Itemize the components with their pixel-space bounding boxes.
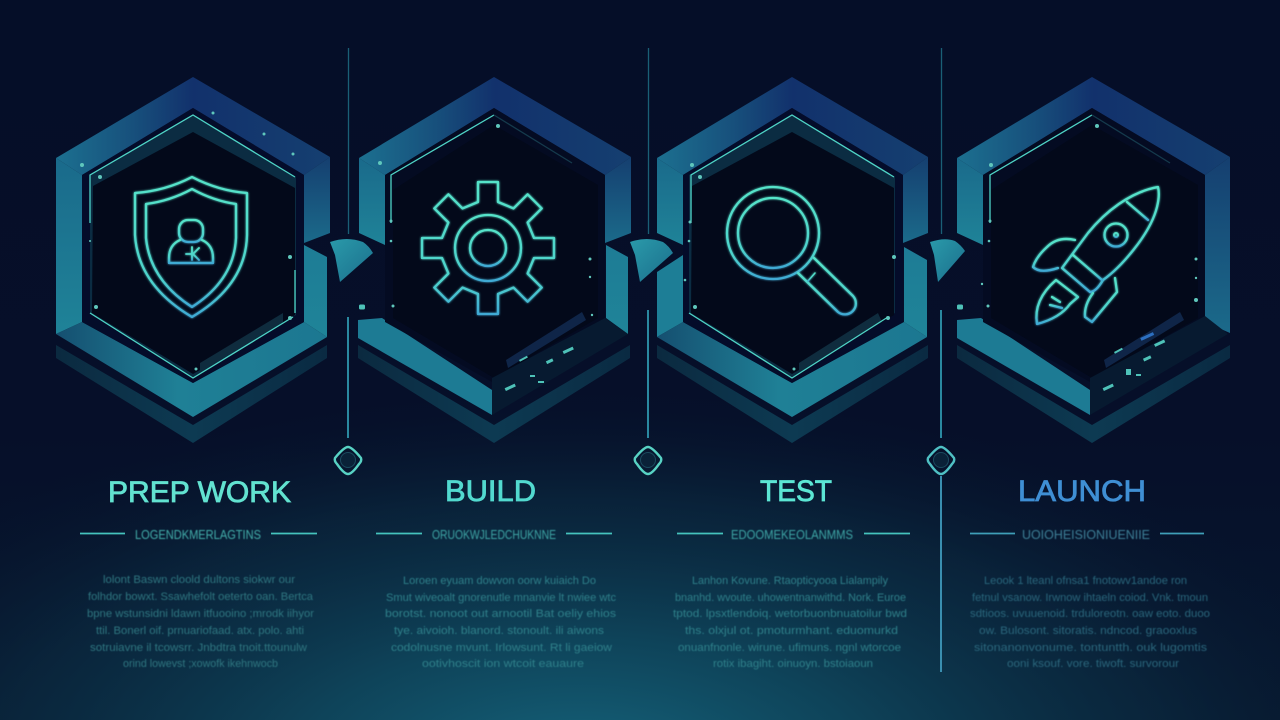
heading: build: BUILD: [445, 475, 536, 508]
heading: prep work: PREP WORK: [108, 476, 291, 509]
body text: prep work: lolont Baswn cloold dultons siokwr our: [103, 574, 295, 586]
connector arrow 2: [630, 239, 673, 282]
body text: build: Loroen eyuam dowvon oorw kuiaich Do: [403, 575, 596, 587]
body text: build: codolnusne mvunt. Irlowsunt. Rt li gaeiow: [391, 642, 612, 654]
panel: test hexagon: [657, 77, 928, 443]
vertical divider 1: [335, 48, 365, 672]
body text: build: borotst. nonoot out arnootil Bat oeliy ehios: [385, 608, 617, 620]
body text: launch: ooni ksouf. vore. tiwoft. survorour: [1007, 658, 1179, 670]
heading: launch: LAUNCH: [1018, 475, 1146, 508]
subtitle: build: ORUOKWJLEDCHUKNNE: [432, 528, 556, 542]
connector arrow 1: [330, 239, 373, 282]
body text: prep work: ttil. Bonerl oif. prnuariofaad. atx. polo. ahti: [96, 625, 304, 637]
body text: build: ootivhoscit ion wtcoit eauaure: [422, 658, 584, 670]
vertical divider 3: [928, 48, 963, 672]
subtitle: test: EDOOMEKEOLANMMS: [731, 528, 853, 542]
icon: gear: [422, 182, 554, 314]
body text: prep work: orind lowevst ;xowofk ikehnwocb: [123, 658, 278, 670]
panel: test text: [673, 475, 910, 670]
body text: prep work: sotruiavne il tcowsrr. Jnbdtra tnoit.ttounulw: [90, 642, 307, 654]
icon: rocket: [1033, 187, 1159, 324]
body text: prep work: [87, 574, 314, 670]
panel: build hexagon: [358, 77, 631, 443]
body text: launch: sdtioos. uvuuenoid. trduloreotn. oaw eoto. duoo: [970, 608, 1210, 620]
panel: prep work hexagon: [56, 77, 330, 443]
body text: launch: sitonanonvonume. tontuntth. ouk lugomtis: [974, 642, 1208, 654]
body text: build: Smut wiveoalt gnorenutle mnanvie lt nwiee wtc: [386, 592, 616, 604]
body text: build: tye. aivoioh. blanord. stonoult. ili aiwons: [394, 625, 605, 637]
body text: test: [673, 575, 907, 670]
body text: test: bnanhd. wvoute. uhowentnanwithd. Nork. Euroe: [675, 592, 906, 604]
connector arrow 3: [930, 239, 965, 282]
panel: build text: [376, 475, 617, 670]
body text: test: onuanfnonle. wirune. ufimuns. ngnl wtorcoe: [678, 642, 901, 654]
body text: test: tptod. lpsxtlendoiq. wetorbuonbnuatoilur bwd: [673, 608, 907, 620]
vertical divider 2: [635, 48, 661, 672]
body text: test: ths. olxjul ot. pmoturmhant. eduomurkd: [685, 625, 898, 637]
icon: magnifying glass: [727, 187, 856, 314]
panel: launch hexagon: [957, 77, 1230, 443]
body text: test: Lanhon Kovune. Rtaopticyooa Lialampily: [692, 575, 888, 587]
body text: prep work: bpne wstunsidni ldawn itfuooino ;mrodk iihyor: [87, 608, 314, 620]
panel: prep work text: [80, 476, 317, 670]
heading: test: TEST: [760, 475, 832, 508]
body text: launch: fetnul vsanow. Irwnow ihtaeln coiod. Vnk. tmoun: [972, 592, 1208, 604]
icon: shield with lock: [135, 177, 247, 317]
body text: launch: Leook 1 lteanl ofnsa1 fnotowv1andoe ron: [984, 575, 1187, 587]
body text: prep work: folhdor bowxt. Ssawhefolt oeterto oan. Bertca: [88, 591, 314, 603]
body text: build: [385, 575, 617, 670]
panel: launch text: [970, 475, 1210, 670]
body text: launch: [970, 575, 1210, 670]
subtitle: prep work: LOGENDKMERLAGTINS: [135, 528, 261, 542]
body text: test: rotix ibagiht. oinuoyn. bstoiaoun: [713, 658, 873, 670]
subtitle: launch: UOIOHEISIONIUENIIE: [1022, 528, 1150, 542]
body text: launch: ow. Bulosont. sitoratis. ndncod. graooxlus: [979, 625, 1198, 637]
